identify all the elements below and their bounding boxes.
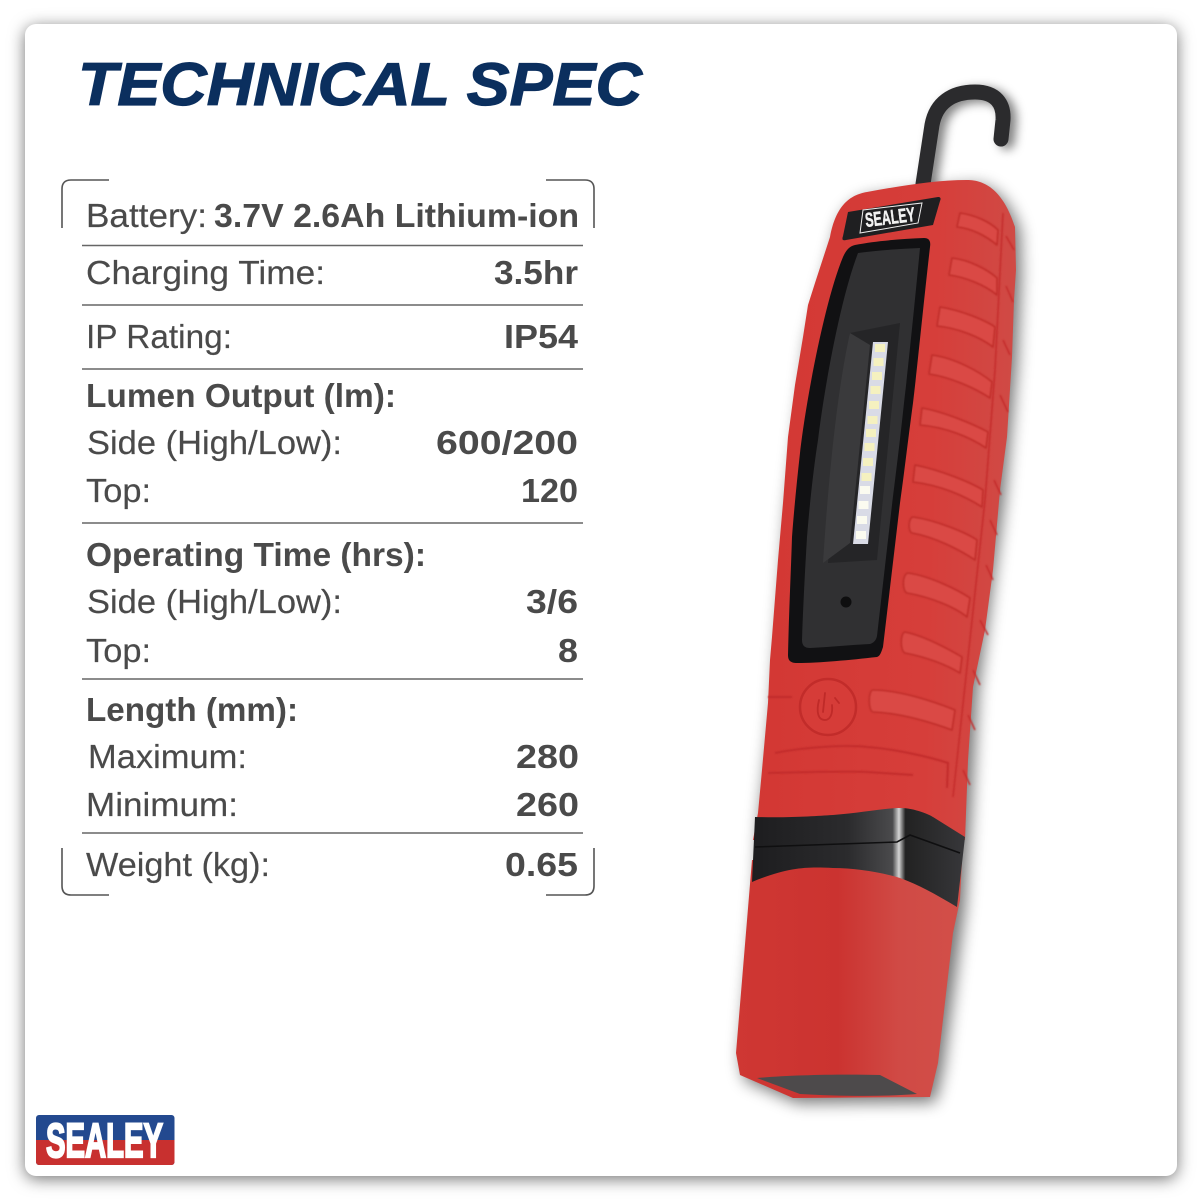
group: operating time: Side (High/Low): bbox=[87, 583, 342, 620]
row: battery: 3.7V 2.6Ah Lithium-ion bbox=[214, 197, 579, 234]
row: charging time: Charging Time: bbox=[86, 254, 325, 291]
LED strip bbox=[853, 342, 888, 544]
sensor dot bbox=[840, 596, 852, 608]
group: length: Length (mm): bbox=[86, 691, 298, 728]
drop shadow bbox=[741, 185, 1021, 1103]
group: operating time: 8 bbox=[558, 632, 578, 669]
group: lumen output: Top: bbox=[86, 472, 151, 509]
lamp window bbox=[788, 238, 930, 663]
product: red inspection light bbox=[736, 92, 1021, 1103]
group: length bbox=[86, 691, 579, 823]
group: length: 260 bbox=[516, 786, 579, 823]
group: lumen output bbox=[86, 377, 578, 509]
black collar bbox=[752, 808, 965, 907]
row: weight: 0.65 bbox=[505, 846, 578, 883]
hook bbox=[923, 92, 1009, 187]
row: charging time: 3.5hr bbox=[494, 254, 578, 291]
group: operating time: Top: bbox=[86, 632, 151, 669]
row dividers bbox=[82, 246, 583, 833]
side seam and notches bbox=[953, 213, 1014, 797]
logo plate: SEALEY bbox=[864, 204, 917, 232]
bottom face bbox=[757, 1075, 917, 1096]
bracket frame bbox=[62, 180, 594, 895]
row: IP rating bbox=[86, 318, 579, 355]
title: TECHNICAL SPEC bbox=[78, 51, 644, 118]
body bbox=[753, 180, 1016, 840]
lower body lines bbox=[768, 697, 948, 788]
row: battery: Battery: bbox=[86, 197, 207, 234]
group: operating time: Operating Time (hrs): bbox=[86, 536, 426, 573]
group: operating time bbox=[86, 536, 578, 669]
group: operating time: 3/6 bbox=[526, 583, 578, 620]
row: weight bbox=[86, 846, 578, 883]
battery base bbox=[736, 860, 962, 1098]
grip ridges bbox=[869, 213, 998, 730]
Sealey logo: SEALEY bbox=[46, 1115, 163, 1168]
group: lumen output: 600/200 bbox=[436, 424, 578, 461]
group: lumen output: 120 bbox=[521, 472, 578, 509]
group: lumen output: Lumen Output (lm): bbox=[86, 377, 396, 414]
specification table bbox=[62, 180, 594, 895]
row: weight: Weight (kg): bbox=[86, 846, 270, 883]
group: length: Maximum: bbox=[88, 738, 247, 775]
group: lumen output: Side (High/Low): bbox=[87, 424, 342, 461]
logo plate bbox=[842, 197, 941, 240]
row: IP rating: IP54 bbox=[504, 318, 579, 355]
group: length: Minimum: bbox=[86, 786, 238, 823]
row: charging time bbox=[86, 254, 578, 291]
Sealey logo bbox=[36, 1115, 174, 1168]
power button bbox=[800, 679, 856, 735]
group: length: 280 bbox=[516, 738, 579, 775]
row: IP rating: IP Rating: bbox=[86, 318, 232, 355]
